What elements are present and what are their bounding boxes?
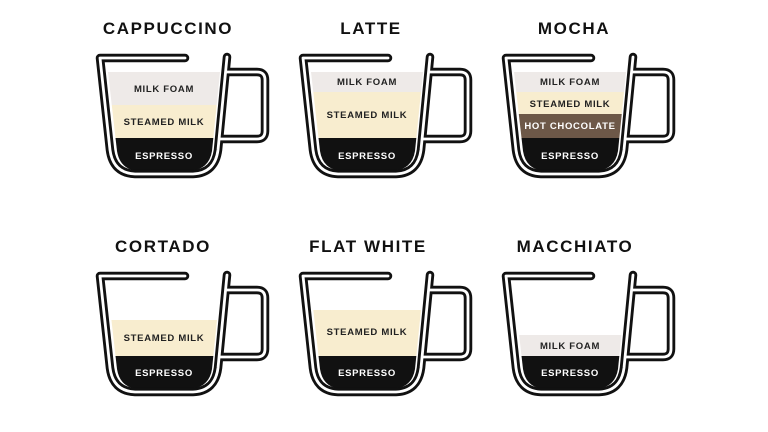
cup outline: [100, 275, 265, 392]
labels: mocha: ESPRESSO: [541, 151, 599, 162]
panel: cortado: [97, 237, 265, 396]
labels: mocha: [524, 77, 616, 162]
labels: cortado: [124, 333, 204, 379]
layers: macchiato: [519, 335, 622, 388]
layers: cortado: [112, 320, 217, 388]
panel: latte: [300, 19, 468, 178]
cup outline: [303, 57, 468, 174]
labels: latte: [327, 77, 407, 162]
labels: cortado: ESPRESSO: [135, 368, 193, 379]
cup outline: [506, 275, 671, 392]
labels: cortado: STEAMED MILK: [124, 333, 204, 344]
labels: macchiato: MILK FOAM: [540, 341, 600, 352]
labels: flat white: STEAMED MILK: [327, 327, 407, 338]
labels: cappuccino: ESPRESSO: [135, 151, 193, 162]
panel: macchiato: [503, 237, 671, 396]
cup outline: [303, 275, 468, 392]
layers: cappuccino: [108, 72, 220, 170]
title: macchiato: MACCHIATO: [517, 237, 633, 256]
cup outline: [100, 57, 265, 174]
labels: mocha: MILK FOAM: [540, 77, 600, 88]
panel: cappuccino: [97, 19, 265, 178]
title: mocha: MOCHA: [538, 19, 610, 38]
panel: mocha: [503, 19, 671, 178]
labels: cappuccino: MILK FOAM: [134, 84, 194, 95]
title: cortado: CORTADO: [115, 237, 211, 256]
labels: mocha: STEAMED MILK: [530, 99, 610, 110]
layers: flat white: [313, 310, 421, 388]
labels: cappuccino: [124, 84, 204, 162]
labels: macchiato: [540, 341, 600, 379]
title: cappuccino: CAPPUCCINO: [103, 19, 233, 38]
labels: latte: ESPRESSO: [338, 151, 396, 162]
labels: latte: STEAMED MILK: [327, 110, 407, 121]
labels: latte: MILK FOAM: [337, 77, 397, 88]
labels: mocha: HOT CHOCOLATE: [524, 121, 616, 132]
layers: mocha: [514, 72, 626, 170]
title: latte: LATTE: [340, 19, 402, 38]
labels: cappuccino: STEAMED MILK: [124, 117, 204, 128]
labels: macchiato: ESPRESSO: [541, 368, 599, 379]
labels: flat white: [327, 327, 407, 379]
labels: flat white: ESPRESSO: [338, 368, 396, 379]
cup outline: [506, 57, 671, 174]
panel: flat white: [300, 237, 468, 396]
title: flat white: FLAT WHITE: [309, 237, 427, 256]
layers: latte: [311, 72, 423, 170]
